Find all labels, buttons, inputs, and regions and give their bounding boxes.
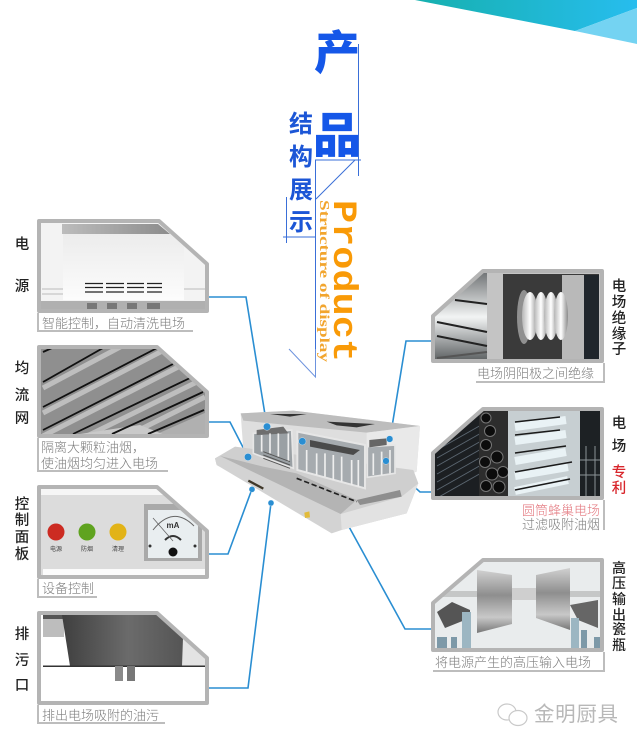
- panel: power supply: [38, 221, 209, 331]
- label: electric field: 电: [612, 415, 627, 432]
- watermark: [498, 703, 618, 726]
- insulator frame: [433, 271, 602, 361]
- icon: wechat: [498, 704, 527, 726]
- label: insulator: [612, 278, 627, 358]
- drain image: [43, 615, 205, 681]
- label: power: [15, 236, 30, 295]
- label: flow screen: 流: [15, 387, 30, 404]
- flow screen caption: 隔离大颗粒油烟，: [41, 440, 145, 455]
- label: drain: 口: [15, 678, 29, 694]
- control panel frame: [39, 487, 207, 577]
- electric field caption: [522, 503, 600, 532]
- label: control panel: [15, 496, 30, 563]
- indicator lights: [48, 524, 126, 540]
- label: porcelain: 高: [612, 560, 626, 576]
- label: insulator: 绝: [612, 309, 626, 327]
- label: electric field: 利: [612, 480, 626, 497]
- label: flow screen: 均: [15, 360, 29, 377]
- label: drain: 排: [15, 626, 29, 643]
- english title: Product: [323, 200, 361, 362]
- porcelain frame: [433, 560, 602, 650]
- label: electric field: 场: [612, 438, 626, 455]
- english subtitle: Structure of display: [316, 200, 331, 362]
- label: porcelain: 瓶: [612, 637, 626, 653]
- power supply caption: 智能控制，自动清洗电场: [42, 316, 185, 331]
- title: structure display: 构: [289, 144, 313, 171]
- flow screen frame: [39, 347, 207, 436]
- insulator caption: 电场阴阳极之间绝缘: [477, 366, 594, 381]
- porcelain caption: 将电源产生的高压输入电场: [435, 655, 591, 670]
- ammeter: [144, 504, 202, 561]
- label: drain: [15, 626, 29, 694]
- label: insulator: 子: [612, 341, 626, 358]
- label: porcelain: 出: [612, 607, 626, 623]
- flow screen caption: 使油烟均匀进入电场: [41, 456, 158, 471]
- label: insulator: 电: [612, 278, 627, 295]
- upper housing: [241, 411, 420, 490]
- insulator coil: [522, 292, 568, 340]
- drain frame: [39, 613, 207, 703]
- panel: control panel: [38, 487, 209, 597]
- hood base: [215, 447, 418, 530]
- filter cells: [253, 430, 293, 468]
- label: control panel: 控: [15, 496, 30, 513]
- electric field caption: 圆筒蜂巢电场: [522, 503, 600, 518]
- label: insulator: 缘: [612, 326, 627, 343]
- power supply image: [39, 221, 209, 311]
- central machine: [215, 411, 420, 533]
- title: structure display: 结: [289, 111, 313, 138]
- control panel image: [39, 487, 209, 577]
- title lines: [283, 44, 361, 377]
- label: porcelain: 输: [612, 591, 626, 607]
- ammeter: mA: [167, 521, 180, 530]
- hood front face: [215, 456, 342, 533]
- title: structure display: 展: [289, 177, 313, 204]
- watermark text: 金明厨具: [534, 703, 618, 726]
- electric field image: [435, 411, 600, 496]
- control panel caption: 设备控制: [42, 581, 94, 596]
- panel: insulator: [431, 269, 604, 382]
- corner ribbon: [415, 0, 637, 44]
- drain caption: 排出电场吸附的油污: [42, 708, 159, 723]
- control panel image: 防烟: [81, 545, 93, 553]
- electric field frame: [433, 409, 602, 498]
- label: flow screen: 网: [15, 411, 29, 427]
- label: control panel: 制: [15, 512, 29, 529]
- label: flow screen: [15, 360, 30, 427]
- label: control panel: 面: [15, 530, 29, 546]
- control panel image: 电源: [50, 545, 62, 553]
- connector lines: [209, 297, 431, 688]
- label: porcelain: 瓷: [612, 621, 626, 637]
- label: power: 源: [15, 278, 30, 295]
- title: product: 产: [314, 27, 360, 79]
- label: porcelain: [612, 560, 626, 653]
- insulator image: [435, 273, 600, 359]
- title: [283, 27, 361, 377]
- porcelain image: [435, 562, 600, 648]
- title: structure display: 示: [289, 209, 313, 236]
- flow screen image: [39, 346, 209, 437]
- label: power: 电: [15, 236, 30, 253]
- label: insulator: 场: [612, 294, 626, 311]
- marker dots: [244, 423, 393, 506]
- title: product 2: 品: [313, 110, 361, 163]
- panel: flow screen: [38, 346, 209, 471]
- label: electric field: 专: [612, 464, 626, 481]
- flow screen caption: [41, 440, 158, 471]
- panel: high voltage porcelain: [431, 558, 604, 671]
- power supply frame: [39, 221, 207, 311]
- title: structure display: [289, 111, 313, 236]
- label: control panel: 板: [15, 546, 30, 563]
- label: drain: 污: [15, 652, 29, 669]
- label: electric field: [612, 415, 627, 497]
- electric field caption: 过滤吸附油烟: [522, 517, 600, 532]
- control panel image: 清理: [112, 545, 124, 553]
- panel: drain: [38, 613, 209, 723]
- label: porcelain: 压: [612, 575, 626, 591]
- panel: electric field: [431, 407, 604, 532]
